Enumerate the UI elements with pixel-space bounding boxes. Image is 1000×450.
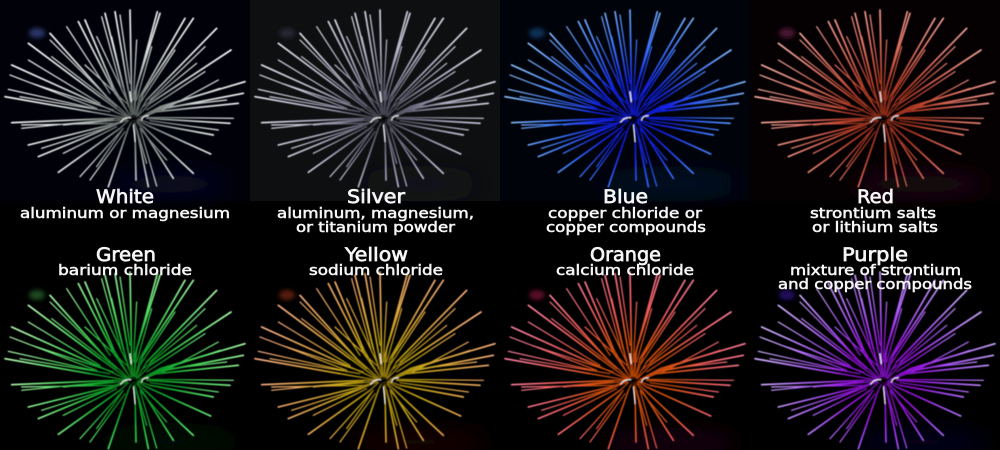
label: purple: Purple [842,244,908,266]
firework: purple [755,272,995,449]
label: white: White [96,186,154,208]
label: blue: copper chloride or [548,206,702,222]
label: red: Red [857,186,894,208]
label: green: Green [96,244,156,266]
firework: orange [505,272,745,449]
firework: white [5,10,245,187]
firework: blue [505,10,745,187]
label: blue: copper compounds [546,220,706,236]
label: green: barium chloride [58,263,192,279]
label: white [20,186,230,222]
label: green [58,244,192,279]
label: white: aluminum or magnesium [20,206,230,222]
firework: silver [255,10,495,187]
panel: white [0,0,250,222]
label: silver: Silver [347,186,405,208]
label: silver [277,186,474,236]
label: blue [546,186,706,236]
panel: silver [250,0,500,236]
firework: green [5,272,245,449]
label: yellow [309,244,443,279]
label: yellow: Yellow [344,244,408,266]
label: purple [778,244,972,293]
label: silver: aluminum, magnesium, [277,206,474,222]
panel: red [750,0,1000,236]
panel: purple [755,244,995,450]
label: red: or lithium salts [812,220,938,236]
label: purple: and copper compounds [778,277,972,293]
panel: orange [505,244,745,450]
label: orange: Orange [590,244,661,266]
label: orange [556,244,694,279]
label: orange: calcium chloride [556,263,694,279]
firework: yellow [255,272,495,449]
panel: blue [500,0,750,236]
label: red: strontium salts [810,206,936,222]
label: yellow: sodium chloride [309,263,443,279]
label: purple: mixture of strontium [790,263,961,279]
label: silver: or titanium powder [296,220,455,236]
firework: red [755,10,995,187]
panel: yellow [255,244,495,450]
panel: green [5,244,245,450]
label: red [810,186,938,236]
label: blue: Blue [603,186,648,208]
